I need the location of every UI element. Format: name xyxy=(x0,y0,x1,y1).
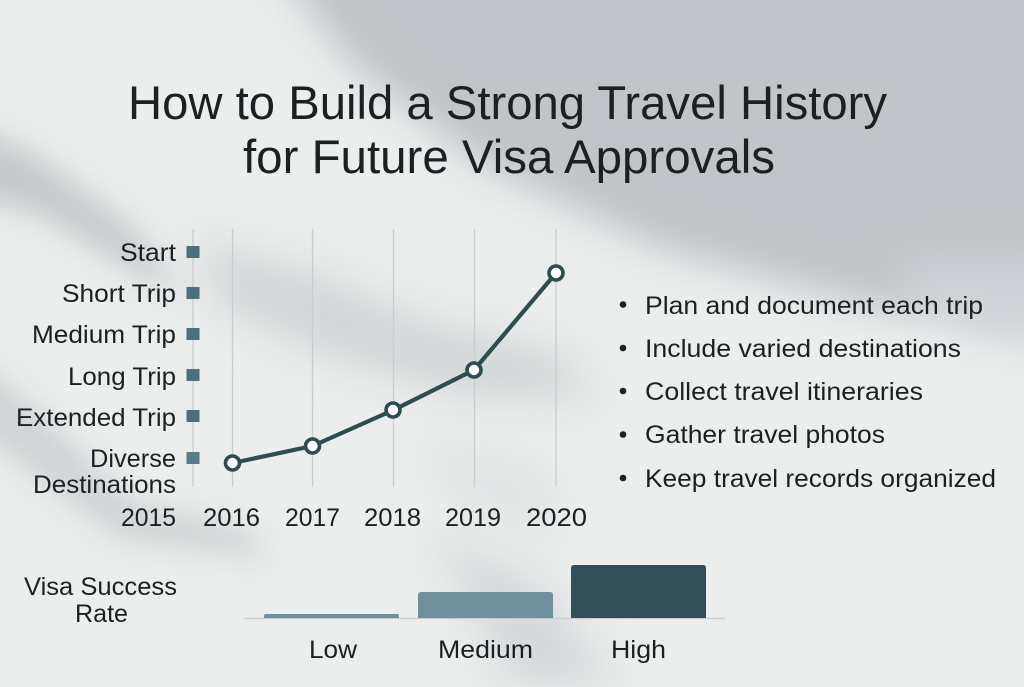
y-axis category labels: Medium Trip xyxy=(32,321,176,349)
bullet list: tips xyxy=(620,292,996,493)
x-axis year labels: 2015 xyxy=(121,504,176,532)
bar chart label: Rate xyxy=(75,600,128,628)
bar category labels: Low xyxy=(309,636,358,664)
bullet list: tips: Keep travel records organized xyxy=(645,465,996,493)
bar category labels: Medium xyxy=(438,636,533,664)
y-axis category labels: Destinations xyxy=(33,471,176,499)
x-axis year labels: 2017 xyxy=(285,504,340,532)
x-axis year labels: 2018 xyxy=(364,504,421,532)
bar: medium xyxy=(418,592,553,618)
bar: low xyxy=(264,614,399,618)
y-axis category labels: Extended Trip xyxy=(16,404,176,432)
bar category labels xyxy=(309,636,666,664)
title xyxy=(128,76,887,183)
x-axis year labels: 2020 xyxy=(526,504,587,532)
bullet dots xyxy=(620,301,626,481)
bar chart: visa success rate xyxy=(24,565,725,664)
x-axis year labels: 2019 xyxy=(445,504,501,532)
y-axis category labels: Start xyxy=(120,239,176,267)
y-axis category labels: Diverse xyxy=(90,445,176,473)
y-axis category labels xyxy=(16,239,176,499)
bar: high xyxy=(571,565,706,618)
y-axis category labels: Long Trip xyxy=(68,363,176,391)
x-axis year labels: 2016 xyxy=(203,504,260,532)
bullet list: tips: Include varied destinations xyxy=(645,335,961,363)
bullet list: tips: Collect travel itineraries xyxy=(645,378,923,406)
bullet list: tips: Gather travel photos xyxy=(645,421,885,449)
bar category labels: High xyxy=(611,636,666,664)
x-axis year labels xyxy=(121,504,587,532)
y-axis square markers xyxy=(186,246,200,464)
trend line with points xyxy=(226,266,563,470)
bar chart label: Visa Success xyxy=(24,573,177,601)
y-axis category labels: Short Trip xyxy=(62,280,176,308)
title: How to Build a Strong Travel History xyxy=(128,76,887,129)
line chart: travel history by year xyxy=(16,229,587,532)
bullet list: tips: Plan and document each trip xyxy=(645,292,983,320)
title: for Future Visa Approvals xyxy=(243,130,775,183)
bar chart label xyxy=(24,573,177,628)
